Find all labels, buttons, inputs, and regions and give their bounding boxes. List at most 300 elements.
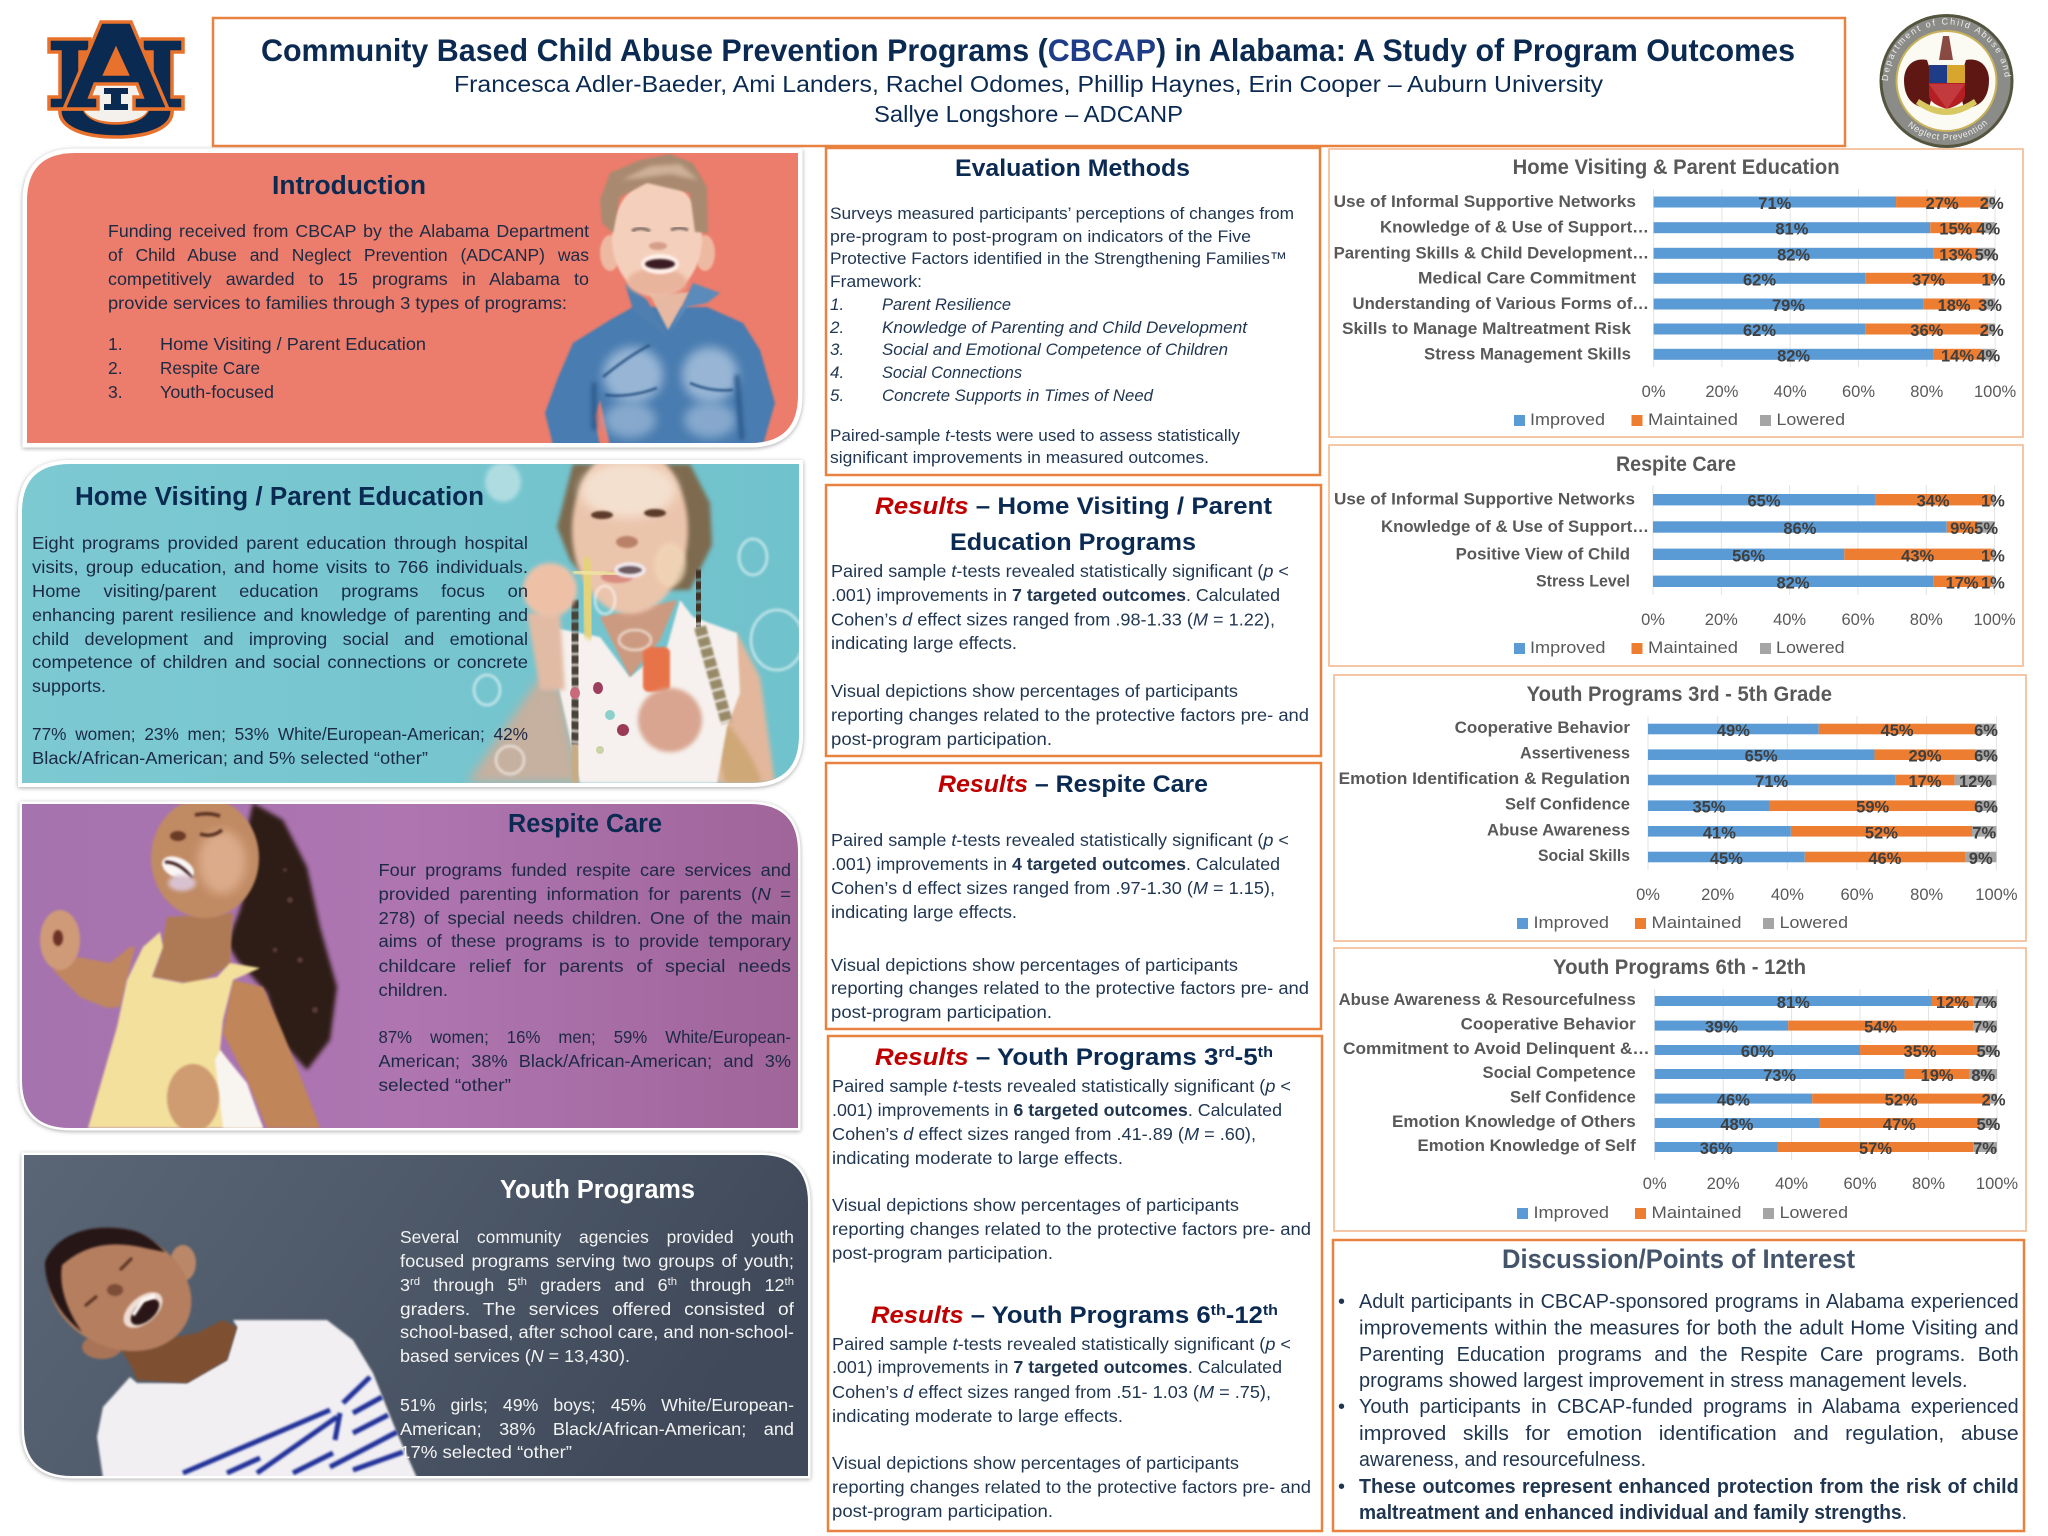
data labels: 3%	[1978, 297, 2002, 315]
icon: state department seal: Department of Child Abuse and	[1882, 18, 2012, 80]
data labels: 6%	[1974, 722, 1998, 740]
data labels: 4%	[1976, 347, 2001, 365]
photo: laughing boy in denim shirt	[545, 154, 775, 445]
protective factors list: 4.	[830, 363, 844, 382]
data labels: 48%	[1720, 1116, 1754, 1134]
legend: Maintained	[1652, 1204, 1742, 1222]
intro text: provide services to families through 3 types of programs:	[108, 293, 567, 313]
category labels: Use of Informal Supportive Networks	[1334, 491, 1635, 509]
stacked bars	[1648, 724, 1996, 862]
bullet 3: conclusion	[1338, 1476, 2019, 1524]
data labels: 37%	[1912, 271, 1945, 289]
t-test note: significant improvements in measured outcomes.	[830, 448, 1209, 467]
legend: Improved	[1530, 639, 1606, 657]
description text: through 12	[677, 1275, 785, 1295]
demographics text: American; 38% Black/African-American; and 3%	[378, 1051, 791, 1071]
chart title: Youth Programs 6th - 12th	[1553, 955, 1806, 979]
description text	[400, 1227, 794, 1366]
axis labels: 40%	[1775, 1175, 1808, 1193]
heading: grades 3-5: -5	[1235, 1044, 1258, 1071]
category labels: Emotion Identification & Regulation	[1339, 770, 1630, 788]
stacked bars	[1653, 494, 1995, 587]
panel: discussion / points of interest	[1333, 1240, 2024, 1531]
bullet 2: youth participants: improved skills for emotion identification and regulation, abuse	[1359, 1423, 2019, 1445]
data labels: 29%	[1908, 748, 1942, 766]
heading: grades 3-5: th	[1258, 1044, 1273, 1061]
description text: childcare relief for parents of special needs	[378, 956, 791, 976]
demographics text: 51% girls; 49% boys; 45% White/European-	[400, 1395, 794, 1415]
category labels: Commitment to Avoid Delinquent &…	[1343, 1040, 1650, 1058]
results text: .001) improvements in 7 targeted outcomes. Calculated	[831, 585, 1280, 605]
data labels: 46%	[1868, 850, 1902, 868]
data labels: 65%	[1745, 748, 1778, 766]
category labels: Stress Level	[1536, 572, 1630, 590]
category labels: Social Skills	[1538, 847, 1630, 865]
data labels	[1743, 195, 2006, 365]
data labels: 54%	[1864, 1019, 1897, 1037]
demographics text	[378, 1027, 791, 1095]
legend: Lowered	[1776, 411, 1845, 429]
description text	[32, 533, 528, 696]
methods text	[830, 204, 1294, 291]
protective factors list: 5.	[830, 386, 844, 405]
results text: grades 6-12: Paired sample t-tests revealed statistically significant ( p <	[832, 1334, 1291, 1354]
photo: laughing boy in striped shirt	[28, 1206, 417, 1478]
category labels: Emotion Knowledge of Others	[1392, 1113, 1636, 1131]
protective factors list: Concrete Supports in Times of Need	[882, 386, 1154, 405]
legend: Maintained	[1648, 411, 1738, 429]
data labels: 2%	[1982, 1092, 2006, 1110]
data labels: 46%	[1717, 1092, 1750, 1110]
category labels: Abuse Awareness	[1487, 821, 1630, 839]
program list: 2.	[108, 358, 123, 378]
legend: Improved	[1530, 411, 1605, 429]
data labels: 45%	[1710, 850, 1743, 868]
results text: grades 6-12	[832, 1334, 1311, 1521]
data labels: 73%	[1763, 1067, 1796, 1085]
category labels: Assertiveness	[1520, 745, 1630, 763]
protective factors list	[829, 295, 1248, 405]
results text: grades 6-12: post-program participation.	[832, 1501, 1053, 1521]
chart title: Respite Care	[1616, 452, 1736, 476]
data labels: 1%	[1981, 574, 2005, 592]
results text: Paired sample t-tests revealed statistically significant ( p <	[831, 830, 1289, 850]
data labels: 5%	[1976, 1043, 2001, 1061]
heading: grades 6-12: Results – Youth Programs 6	[871, 1302, 1195, 1329]
data labels: 52%	[1865, 824, 1898, 842]
results text: Visual depictions show percentages of participants	[831, 681, 1238, 701]
results text: grades 6-12: Cohen’s d effect sizes ranged from .51- 1.03 ( M = .75),	[832, 1382, 1271, 1402]
category labels: Cooperative Behavior	[1455, 719, 1631, 737]
heading: Respite Care	[508, 810, 662, 838]
panel: introduction	[27, 153, 798, 445]
description text: based services (N = 13,430).	[400, 1346, 630, 1366]
results text: grades 6-12: indicating moderate to large effects.	[832, 1406, 1123, 1426]
data labels: 2%	[1980, 195, 2004, 213]
axis labels: 0%	[1641, 611, 1665, 629]
category labels: Self Confidence	[1505, 796, 1630, 814]
data labels: 45%	[1881, 722, 1914, 740]
header box with title	[213, 18, 1845, 146]
category labels	[1334, 193, 1649, 363]
methods text: Surveys measured participants’ perceptions of changes from	[830, 204, 1294, 223]
data labels	[1692, 722, 1998, 868]
heading	[875, 493, 1272, 556]
data labels: 62%	[1743, 271, 1776, 289]
data labels: 62%	[1743, 322, 1776, 340]
affiliation: Sallye Longshore – ADCANP	[874, 101, 1183, 127]
intro text: competitively awarded to 15 programs in Alabama to	[108, 269, 589, 289]
protective factors list: 1.	[830, 295, 844, 314]
legend: Improved	[1534, 1204, 1609, 1222]
axis labels: 60%	[1843, 1175, 1877, 1193]
data labels: 36%	[1700, 1140, 1733, 1158]
description text: school-based, after school care, and non-school-	[400, 1322, 794, 1342]
data labels: 9%	[1950, 520, 1974, 538]
description text: Four programs funded respite care services and	[378, 860, 791, 880]
data labels: 35%	[1903, 1043, 1937, 1061]
results text: grades 3-5: Paired sample t-tests revealed statistically significant ( p <	[832, 1076, 1291, 1096]
data labels: 27%	[1926, 195, 1959, 213]
bullet 3: conclusion: •	[1338, 1476, 1345, 1498]
description text: th	[518, 1276, 527, 1288]
panel: results youth programs	[828, 1036, 1322, 1531]
category labels: Social Competence	[1482, 1064, 1636, 1082]
results text: grades 6-12: Visual depictions show percentages of participants	[832, 1453, 1239, 1473]
protective factors list: Parent Resilience	[882, 295, 1011, 314]
chart title: Youth Programs 3rd - 5th Grade	[1527, 682, 1832, 706]
description text: children.	[378, 980, 448, 1000]
data labels: 5%	[1974, 520, 1998, 538]
data labels: 41%	[1703, 824, 1736, 842]
category labels: Skills to Manage Maltreatment Risk	[1342, 320, 1632, 338]
data labels: 14%	[1941, 347, 1974, 365]
heading: grades 3-5: Results – Youth Programs 3	[875, 1044, 1200, 1071]
axis labels: 60%	[1842, 383, 1875, 401]
results text: grades 3-5: .001) improvements in 6 targeted outcomes. Calculated	[832, 1100, 1282, 1120]
protective factors list: Social and Emotional Competence of Children	[882, 340, 1228, 359]
axis labels	[1642, 383, 2017, 401]
data labels: 12%	[1959, 773, 1992, 791]
axis labels: 80%	[1912, 1175, 1945, 1193]
axis labels: 60%	[1841, 611, 1875, 629]
axis labels: 0%	[1636, 886, 1660, 904]
panel: youth programs	[24, 1155, 808, 1478]
demographics text: 17% selected “other”	[400, 1442, 572, 1462]
results text: grades 3-5: Visual depictions show percentages of participants	[832, 1195, 1239, 1215]
results text: grades 3-5	[832, 1076, 1311, 1263]
description text: rd	[410, 1276, 420, 1288]
data labels: 5%	[1976, 1116, 2001, 1134]
description text: child development and improving social and emotional	[32, 629, 528, 649]
data labels: 4%	[1976, 221, 2001, 239]
description text: 3	[400, 1275, 410, 1295]
data labels: 17%	[1908, 773, 1942, 791]
axis labels: 40%	[1774, 383, 1807, 401]
bullet 1: adult participants	[1338, 1291, 2019, 1392]
axis labels	[1641, 611, 2016, 629]
results text: grades 3-5: reporting changes related to the protective factors pre- and	[832, 1219, 1311, 1239]
bullet 2: youth participants: Youth participants in CBCAP-funded programs in Alabama experienced	[1359, 1396, 2019, 1418]
data labels: 7%	[1973, 1019, 1997, 1037]
axis labels: 0%	[1643, 1175, 1667, 1193]
category labels: Self Confidence	[1510, 1089, 1636, 1107]
data labels: 1%	[1981, 493, 2005, 511]
results text	[831, 830, 1309, 1022]
results text: indicating large effects.	[831, 902, 1017, 922]
description text: Home visiting/parent education programs focus on	[32, 581, 528, 601]
protective factors list: Knowledge of Parenting and Child Development	[882, 318, 1248, 337]
data labels: 7%	[1972, 824, 1996, 842]
category labels: Knowledge of & Use of Support…	[1381, 518, 1649, 536]
results text: reporting changes related to the protective factors pre- and	[831, 978, 1309, 998]
results text	[831, 561, 1309, 749]
data labels: 1%	[1981, 547, 2005, 565]
axis labels: 20%	[1707, 1175, 1740, 1193]
axis labels: 60%	[1840, 886, 1874, 904]
stacked bars	[1654, 196, 1995, 360]
authors: Francesca Adler-Baeder, Ami Landers, Rachel Odomes, Phillip Haynes, Erin Cooper – Auburn University	[454, 71, 1603, 97]
results text: Paired sample t-tests revealed statistically significant ( p <	[831, 561, 1289, 581]
data labels: 1%	[1981, 271, 2006, 289]
axis labels: 80%	[1910, 886, 1944, 904]
data labels: 7%	[1973, 1140, 1997, 1158]
data labels: 39%	[1705, 1019, 1738, 1037]
protective factors list: 3.	[830, 340, 844, 359]
heading: Education Programs	[950, 529, 1196, 556]
data labels: 79%	[1772, 297, 1805, 315]
heading: Results – Respite Care	[938, 771, 1208, 798]
data labels: 2%	[1980, 322, 2004, 340]
axis labels: 40%	[1773, 611, 1806, 629]
data labels: 35%	[1692, 799, 1726, 817]
program list	[108, 334, 426, 402]
axis labels	[1643, 1175, 2018, 1193]
axis labels: 40%	[1771, 886, 1804, 904]
axis labels: 20%	[1705, 383, 1739, 401]
results text: grades 3-5: indicating moderate to large effects.	[832, 1148, 1123, 1168]
panel: results respite care	[826, 763, 1321, 1029]
description text: aims of these programs is to provide temporary	[378, 931, 791, 951]
description text: enhancing parent resilience and knowledge of parenting and	[32, 605, 528, 625]
data labels: 12%	[1936, 994, 1969, 1012]
demographics text	[400, 1395, 794, 1462]
panel: evaluation methods	[826, 148, 1320, 475]
data labels: 71%	[1755, 773, 1789, 791]
intro text: Funding received from CBCAP by the Alabama Department	[108, 221, 589, 241]
panel: home visiting / parent education	[22, 446, 803, 783]
panel: respite care	[22, 798, 798, 1132]
results text: grades 3-5: post-program participation.	[832, 1243, 1053, 1263]
demographics text	[32, 724, 528, 768]
heading: Youth Programs	[500, 1176, 695, 1204]
bullet 2: youth participants: awareness, and resourcefulness.	[1359, 1449, 1646, 1471]
t-test note	[830, 426, 1240, 467]
bullet 1: adult participants: Adult participants in CBCAP-sponsored programs in Alabama experienced	[1359, 1291, 2019, 1313]
results text: Cohen’s d effect sizes ranged from .98-1.33 ( M = 1.22),	[831, 610, 1275, 630]
bullet 1: adult participants: •	[1338, 1291, 1345, 1313]
bullet 2: youth participants: •	[1338, 1396, 1345, 1418]
chart: youth programs 6th - 12th	[1334, 948, 2026, 1231]
heading: Discussion/Points of Interest	[1502, 1244, 1855, 1274]
data labels: 36%	[1910, 322, 1944, 340]
category labels: Use of Informal Supportive Networks	[1334, 193, 1636, 211]
legend	[1514, 639, 1845, 657]
methods text: Protective Factors identified in the Strengthening Families™	[830, 249, 1287, 268]
axis labels: 100%	[1975, 886, 2018, 904]
protective factors list: 2.	[829, 318, 844, 337]
axis labels: 80%	[1910, 611, 1943, 629]
description text: th	[668, 1276, 677, 1288]
chart title: Home Visiting & Parent Education	[1513, 155, 1840, 179]
program list: 3.	[108, 382, 123, 402]
axis labels: 0%	[1642, 383, 1666, 401]
data labels: 15%	[1939, 221, 1973, 239]
results text: Visual depictions show percentages of participants	[831, 955, 1238, 975]
category labels: Emotion Knowledge of Self	[1418, 1137, 1636, 1155]
data labels: 6%	[1974, 799, 1998, 817]
results text: grades 3-5: Cohen’s d effect sizes ranged from .41-.89 ( M = .60),	[832, 1124, 1256, 1144]
category labels: Cooperative Behavior	[1461, 1016, 1636, 1034]
intro text: of Child Abuse and Neglect Prevention (ADCANP) was	[108, 245, 589, 265]
legend	[1514, 411, 1845, 429]
intro text	[108, 221, 589, 313]
results text: indicating large effects.	[831, 633, 1017, 653]
methods text: Framework:	[830, 272, 922, 291]
results text: grades 6-12: .001) improvements in 7 targeted outcomes. Calculated	[832, 1357, 1282, 1377]
heading: Evaluation Methods	[955, 155, 1190, 182]
description text: provided parenting information for parents ( N =	[378, 884, 791, 904]
bullet 1: adult participants: improvements within the measures for both the adult Home Visiting and	[1359, 1318, 2019, 1340]
heading: Results – Home Visiting / Parent	[875, 493, 1272, 520]
chart: respite care	[1329, 445, 2023, 666]
legend: Lowered	[1776, 639, 1845, 657]
description text: graders and 6	[527, 1275, 668, 1295]
chart: youth programs 3rd - 5th grade	[1334, 675, 2026, 941]
axis labels: 80%	[1910, 383, 1944, 401]
description text: th	[785, 1276, 794, 1288]
demographics text: Black/African-American; and 5% selected “other”	[32, 748, 428, 768]
data labels: 8%	[1971, 1067, 1996, 1085]
description text	[378, 860, 791, 1000]
program list: Respite Care	[160, 358, 260, 378]
axis labels: 100%	[1973, 611, 2016, 629]
description text: 278) of special needs children. One of the main	[378, 908, 791, 928]
data labels: 82%	[1777, 246, 1810, 264]
bullet 1: adult participants: Parenting Education programs and the Respite Care programs. Both	[1359, 1344, 2019, 1366]
photo: laughing girl in yellow dress	[40, 798, 337, 1132]
data labels	[1732, 493, 2005, 592]
data labels: 13%	[1939, 246, 1973, 264]
data labels: 81%	[1777, 994, 1810, 1012]
legend: Maintained	[1652, 914, 1742, 932]
photo: girl blowing bubbles	[467, 446, 803, 783]
category labels	[1334, 491, 1649, 590]
data labels: 19%	[1921, 1067, 1954, 1085]
stacked bars	[1655, 996, 1997, 1152]
category labels: Parenting Skills & Child Development…	[1334, 244, 1649, 262]
data labels: 57%	[1859, 1140, 1892, 1158]
legend: Maintained	[1648, 639, 1738, 657]
results text: .001) improvements in 4 targeted outcomes. Calculated	[831, 854, 1280, 874]
results text: grades 6-12: reporting changes related to the protective factors pre- and	[832, 1477, 1311, 1497]
results text: Cohen’s d effect sizes ranged from .97-1.30 ( M = 1.15),	[831, 878, 1275, 898]
data labels: 18%	[1938, 297, 1971, 315]
data labels: 65%	[1747, 493, 1781, 511]
icon: state department seal: Neglect Prevention	[1908, 121, 1988, 140]
axis labels: 20%	[1701, 886, 1735, 904]
title: Community Based Child Abuse Prevention Programs (CBCAP) in Alabama: A Study of Program Outcomes	[261, 32, 1795, 68]
data labels	[1700, 994, 2006, 1158]
category labels: Abuse Awareness & Resourcefulness	[1339, 991, 1636, 1009]
bullet 2: youth participants	[1338, 1396, 2019, 1471]
data labels: 7%	[1973, 994, 1997, 1012]
description text: graders. The services offered consisted of	[400, 1299, 794, 1319]
t-test note: Paired-sample t-tests were used to assess statistically	[830, 426, 1240, 445]
heading: Home Visiting / Parent Education	[75, 483, 484, 511]
bullet 3: conclusion: maltreatment and enhanced individual and family strengths.	[1359, 1502, 1907, 1524]
data labels: 56%	[1732, 547, 1765, 565]
heading: grades 6-12: th	[1211, 1302, 1226, 1319]
demographics text: 87% women; 16% men; 59% White/European-	[378, 1027, 791, 1047]
panel: results home visiting	[826, 485, 1321, 756]
data labels: 6%	[1974, 748, 1998, 766]
data labels: 59%	[1856, 799, 1890, 817]
data labels: 5%	[1975, 246, 1999, 264]
category labels: Medical Care Commitment	[1418, 269, 1637, 287]
data labels: 71%	[1758, 195, 1792, 213]
data labels: 47%	[1883, 1116, 1916, 1134]
results text: post-program participation.	[831, 1002, 1052, 1022]
heading: Introduction	[272, 172, 426, 200]
category labels	[1339, 719, 1631, 865]
data labels: 49%	[1717, 722, 1750, 740]
heading: grades 3-5: rd	[1218, 1044, 1235, 1061]
description text: Eight programs provided parent education through hospital	[32, 533, 528, 553]
program list: Home Visiting / Parent Education	[160, 334, 426, 354]
results text: post-program participation.	[831, 729, 1052, 749]
legend: Lowered	[1780, 1204, 1848, 1222]
demographics text: 77% women; 23% men; 53% White/European-American; 42%	[32, 724, 528, 744]
description text: through 5	[420, 1275, 518, 1295]
description text: focused programs serving two groups of youth;	[400, 1251, 794, 1271]
demographics text: selected “other”	[378, 1075, 511, 1095]
category labels: Positive View of Child	[1456, 545, 1630, 563]
methods text: pre-program to post-program on indicators of the Five	[830, 227, 1251, 246]
data labels: 17%	[1946, 574, 1979, 592]
heading: grades 6-12: th	[1263, 1302, 1278, 1319]
bullet 3: conclusion: These outcomes represent enhanced protection from the risk of child	[1359, 1476, 2019, 1498]
description text: Several community agencies provided youth	[400, 1227, 794, 1247]
description text: competence of children and social connections or concrete	[32, 652, 528, 672]
demographics text: American; 38% Black/African-American; and	[400, 1419, 794, 1439]
description text: supports.	[32, 676, 106, 696]
data labels: 82%	[1777, 347, 1810, 365]
data labels: 43%	[1901, 547, 1935, 565]
chart: home visiting and parent education	[1329, 149, 2023, 437]
data labels: 86%	[1783, 520, 1817, 538]
category labels	[1339, 991, 1650, 1155]
category labels: Stress Management Skills	[1424, 345, 1631, 363]
data labels: 81%	[1775, 221, 1809, 239]
category labels: Knowledge of & Use of Support…	[1380, 219, 1649, 237]
legend: Lowered	[1780, 914, 1848, 932]
data labels: 82%	[1776, 574, 1810, 592]
heading: grades 6-12: -12	[1226, 1302, 1263, 1329]
results text: reporting changes related to the protective factors pre- and	[831, 705, 1309, 725]
logo: Auburn AU	[49, 22, 183, 137]
protective factors list: Social Connections	[882, 363, 1022, 382]
